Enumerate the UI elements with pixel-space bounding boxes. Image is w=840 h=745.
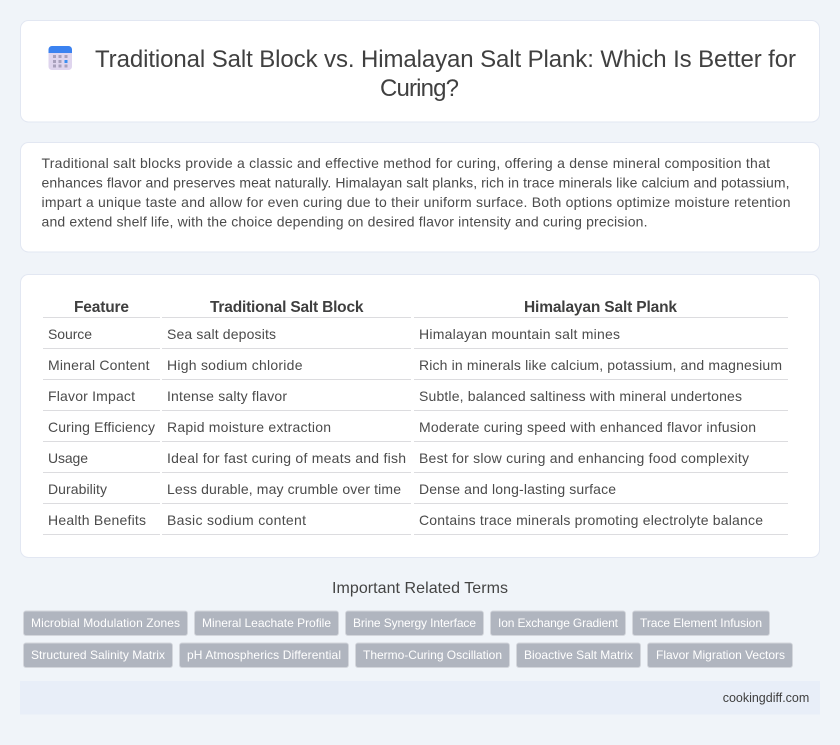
table header row: Feature (74, 299, 129, 316)
tag: Microbial Modulation Zones (31, 616, 180, 630)
row: curing efficiency: Moderate curing speed with enhanced flavor infusion (419, 419, 756, 435)
tag (24, 643, 172, 668)
row: mineral content: High sodium chloride (167, 357, 303, 373)
row: flavor impact: Subtle, balanced saltiness with mineral undertones (419, 388, 742, 404)
row: health benefits: Health Benefits (48, 512, 146, 528)
row: source: Source (48, 326, 92, 342)
row: flavor impact: Intense salty flavor (167, 388, 287, 404)
row: mineral content (48, 357, 782, 373)
row: usage: Best for slow curing and enhancing food complexity (419, 450, 749, 466)
tag: Bioactive Salt Matrix (524, 648, 633, 662)
row: flavor impact: Flavor Impact (48, 388, 135, 404)
tag (356, 643, 510, 668)
icon: calendar (48, 46, 72, 70)
tag (648, 643, 792, 668)
tags: related terms (24, 611, 792, 668)
row: source: Himalayan mountain salt mines (419, 326, 620, 342)
text block: introduction (42, 155, 790, 230)
row: durability: Dense and long-lasting surface (419, 481, 616, 497)
row: health benefits (48, 512, 763, 528)
row: curing efficiency: Curing Efficiency (48, 419, 155, 435)
tag (516, 643, 640, 668)
row: mineral content: Rich in minerals like calcium, potassium, and magnesium (419, 357, 782, 373)
title: Traditional Salt Block vs. Himalayan Salt Plank: Which Is Better for (95, 46, 796, 73)
row: source (48, 326, 620, 342)
row: health benefits: Basic sodium content (167, 512, 306, 528)
table header row: Himalayan Salt Plank (524, 299, 677, 316)
title: Curing? (380, 75, 459, 102)
tag (180, 643, 348, 668)
footer (20, 681, 820, 714)
tag: Trace Element Infusion (640, 616, 762, 630)
tag: Structured Salinity Matrix (31, 648, 165, 662)
row: curing efficiency (48, 419, 756, 435)
tag: Brine Synergy Interface (353, 616, 476, 630)
text block: introduction: enhances flavor and preserves meat naturally. Himalayan salt planks, rich in trace minerals like calcium and potassium, (42, 174, 790, 190)
row: durability (48, 481, 616, 497)
table header row: Traditional Salt Block (210, 299, 364, 316)
tag (24, 611, 188, 636)
row: durability: Durability (48, 481, 107, 497)
tag: Thermo-Curing Oscillation (363, 648, 502, 662)
panel: comparison table (20, 274, 820, 558)
row: mineral content: Mineral Content (48, 357, 150, 373)
footer: cookingdiff.com (723, 691, 809, 705)
tag: Mineral Leachate Profile (202, 616, 331, 630)
row: source: Sea salt deposits (167, 326, 276, 342)
text block: introduction: impart a unique taste and allow for even curing due to their uniform surface. Both options optimize moisture retention (42, 194, 790, 210)
row: health benefits: Contains trace minerals promoting electrolyte balance (419, 512, 763, 528)
tag (346, 611, 484, 636)
row: flavor impact (48, 388, 742, 404)
tag: pH Atmospherics Differential (187, 648, 341, 662)
panel: header (20, 20, 820, 122)
text block: introduction: Traditional salt blocks provide a classic and effective method for curing, offering a dense mineral composition that (42, 155, 770, 171)
tag (632, 611, 770, 636)
text block: introduction: and extend shelf life, with the choice depending on desired flavor intensity and curing precision. (42, 214, 648, 230)
row: usage: Ideal for fast curing of meats and fish (167, 450, 406, 466)
tag (194, 611, 338, 636)
row: durability: Less durable, may crumble over time (167, 481, 401, 497)
row: usage (48, 450, 749, 466)
tag: Ion Exchange Gradient (498, 616, 619, 630)
row: curing efficiency: Rapid moisture extraction (167, 419, 331, 435)
row: usage: Usage (48, 450, 88, 466)
tag (490, 611, 626, 636)
panel: introduction text (20, 142, 820, 252)
table header row (74, 299, 677, 316)
title (95, 46, 796, 102)
tag: Flavor Migration Vectors (656, 648, 785, 662)
heading: related terms: Important Related Terms (332, 580, 508, 597)
